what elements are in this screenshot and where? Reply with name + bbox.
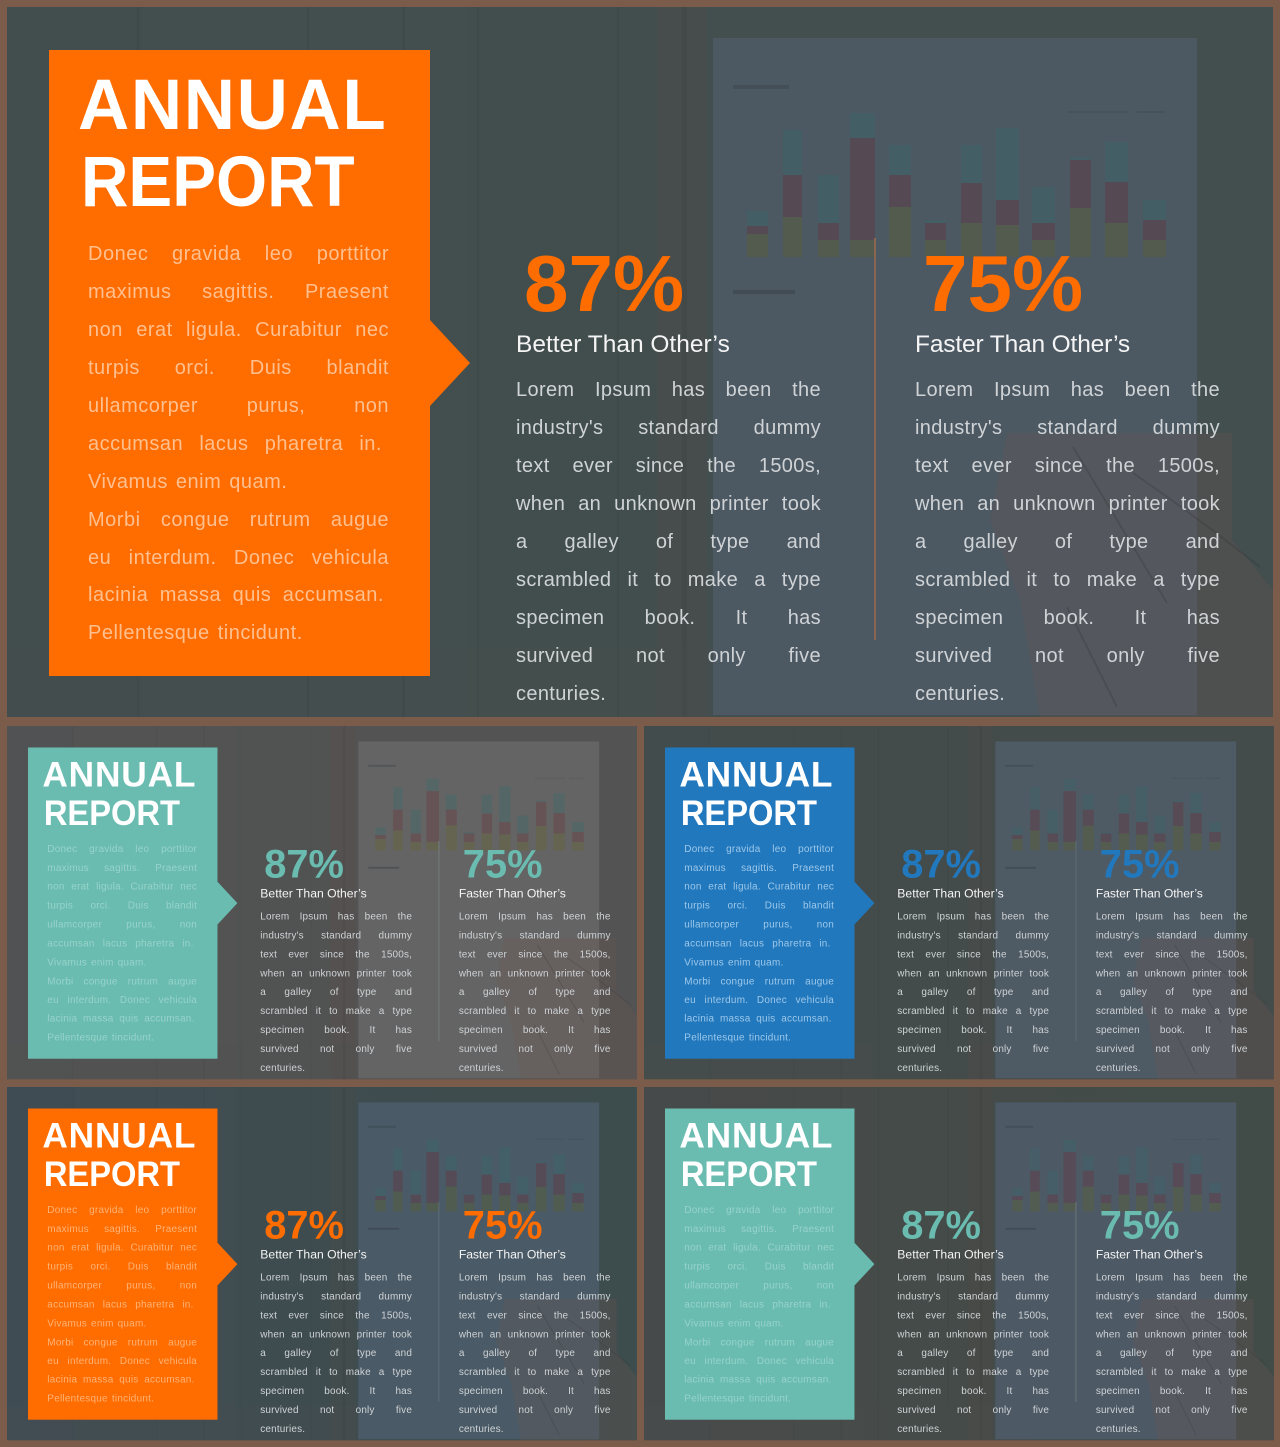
stat body text: centuries.	[1096, 1062, 1141, 1073]
intro text block	[47, 1206, 197, 1404]
stat body text: when an unknown printer took	[897, 1329, 1049, 1340]
stat body text: text ever since the 1500s,	[1096, 949, 1248, 960]
intro text block: turpis orci. Duis blandit	[47, 1261, 197, 1272]
intro text block: maximus sagittis. Praesent	[47, 1223, 197, 1234]
stat body text: when an unknown printer took	[1096, 1329, 1248, 1340]
stat body text: industry's standard dummy	[897, 1291, 1049, 1302]
intro text block: lacinia massa quis accumsan.	[684, 1374, 832, 1385]
title line one: ANNUAL	[42, 1116, 196, 1156]
panel: blue variant	[644, 726, 1274, 1079]
stat body text: specimen book. It has	[1096, 1385, 1248, 1396]
intro text block: turpis orci. Duis blandit	[684, 1261, 834, 1272]
stat body text: Lorem Ipsum has been the	[459, 911, 611, 922]
intro text block: maximus sagittis. Praesent	[88, 281, 389, 303]
background photo with chart	[713, 38, 1273, 717]
stat heading: Faster Than Other’s	[1096, 887, 1203, 901]
stat body text	[1096, 1272, 1248, 1434]
intro text block: accumsan lacus pharetra in.	[684, 1299, 831, 1310]
callout box with arrow	[665, 1108, 874, 1420]
intro text block: Donec gravida leo porttitor	[88, 243, 389, 265]
stat heading: Better Than Other’s	[260, 887, 367, 901]
stat body text: scrambled it to make a type	[459, 1005, 611, 1016]
background photo with chart	[358, 742, 630, 1078]
stat body text: a galley of type and	[459, 1348, 611, 1359]
background photo with chart	[995, 1102, 1274, 1440]
stat number: 87%	[264, 841, 344, 886]
stat body text: specimen book. It has	[459, 1385, 611, 1396]
stat heading: Better Than Other’s	[897, 887, 1004, 901]
stat body text: Lorem Ipsum has been the	[260, 1272, 412, 1283]
stat body text: specimen book. It has	[459, 1024, 611, 1035]
stat body text: Lorem Ipsum has been the	[897, 911, 1049, 922]
stat body text: specimen book. It has	[915, 607, 1220, 629]
intro text block: Morbi congue rutrum augue	[684, 1337, 834, 1348]
stat column: 75 percent	[1096, 841, 1248, 1073]
intro text block	[88, 245, 388, 643]
stat number: 87%	[901, 1202, 981, 1247]
stat body text: a galley of type and	[897, 1348, 1049, 1359]
intro text block: eu interdum. Donec vehicula	[684, 994, 834, 1005]
stat body text: Lorem Ipsum has been the	[897, 1272, 1049, 1283]
stat body text: industry's standard dummy	[260, 1291, 412, 1302]
stat body text: survived not only five	[1096, 1043, 1248, 1054]
stat body text: when an unknown printer took	[260, 1329, 412, 1340]
intro text block: Donec gravida leo porttitor	[684, 843, 834, 854]
stat body text: when an unknown printer took	[897, 968, 1049, 979]
stat number: 75%	[923, 239, 1083, 328]
stat body text: survived not only five	[260, 1404, 412, 1415]
intro text block: non erat ligula. Curabitur nec	[47, 881, 197, 892]
stat body text: survived not only five	[260, 1043, 412, 1054]
stat number: 87%	[264, 1202, 344, 1247]
stat body text: centuries.	[459, 1062, 504, 1073]
stat body text: survived not only five	[1096, 1404, 1248, 1415]
intro text block	[47, 844, 197, 1042]
stat body text	[897, 1272, 1049, 1434]
intro text block: eu interdum. Donec vehicula	[684, 1355, 834, 1366]
title line one: ANNUAL	[78, 66, 387, 145]
stat heading: Faster Than Other’s	[459, 1248, 566, 1262]
intro text block: Vivamus enim quam.	[88, 471, 287, 493]
stat body text: survived not only five	[897, 1043, 1049, 1054]
intro text block: maximus sagittis. Praesent	[684, 862, 834, 873]
stat body text: text ever since the 1500s,	[1096, 1310, 1248, 1321]
background photo with chart	[358, 1102, 637, 1440]
intro text block: Vivamus enim quam.	[47, 957, 147, 968]
stat body text: Lorem Ipsum has been the	[915, 379, 1220, 401]
stat number: 87%	[524, 239, 684, 328]
stat body text: when an unknown printer took	[1096, 968, 1248, 979]
stat column: 75 percent	[458, 1202, 611, 1434]
stat body text: scrambled it to make a type	[260, 1366, 412, 1377]
stat body text: industry's standard dummy	[516, 417, 821, 439]
stat body text: specimen book. It has	[1096, 1024, 1248, 1035]
stat body text: survived not only five	[516, 645, 821, 667]
intro text block: eu interdum. Donec vehicula	[88, 546, 389, 568]
intro text block: Vivamus enim quam.	[684, 957, 784, 968]
intro text block: Pellentesque tincidunt.	[88, 622, 303, 644]
intro text block: Donec gravida leo porttitor	[47, 843, 197, 854]
stat body text	[897, 911, 1049, 1073]
callout box with arrow	[28, 1108, 237, 1420]
background photo with chart	[995, 742, 1274, 1079]
stat body text: Lorem Ipsum has been the	[516, 379, 821, 401]
stat body text	[260, 911, 412, 1073]
stat body text: text ever since the 1500s,	[459, 949, 611, 960]
stat body text: industry's standard dummy	[1096, 930, 1248, 941]
stat body text: survived not only five	[459, 1404, 611, 1415]
stat number: 75%	[1100, 841, 1179, 886]
stat body text: text ever since the 1500s,	[459, 1310, 611, 1321]
stat column: 87 percent	[260, 841, 412, 1073]
stat body text	[915, 379, 1220, 704]
stat column: 87 percent	[897, 841, 1049, 1073]
intro text block: Pellentesque tincidunt.	[684, 1393, 791, 1404]
stat heading: Better Than Other’s	[260, 1248, 367, 1262]
stat body text	[516, 379, 821, 704]
stat body text: scrambled it to make a type	[897, 1366, 1049, 1377]
callout box with arrow	[665, 747, 874, 1059]
stat column: 87 percent	[516, 239, 821, 704]
intro text block: Donec gravida leo porttitor	[47, 1204, 197, 1215]
stat body text: centuries.	[516, 682, 606, 704]
stat body text: when an unknown printer took	[516, 493, 821, 515]
stat body text: centuries.	[915, 682, 1005, 704]
intro text block: accumsan lacus pharetra in.	[47, 1299, 194, 1310]
intro text block: accumsan lacus pharetra in.	[47, 938, 194, 949]
stat body text: a galley of type and	[897, 987, 1049, 998]
intro text block: ullamcorper purus, non	[47, 1280, 197, 1291]
stat body text: when an unknown printer took	[260, 968, 412, 979]
title line one: ANNUAL	[679, 755, 833, 795]
stat body text: scrambled it to make a type	[915, 569, 1220, 591]
intro text block: Donec gravida leo porttitor	[684, 1204, 834, 1215]
intro text block: lacinia massa quis accumsan.	[47, 1374, 195, 1385]
stat body text: text ever since the 1500s,	[260, 1310, 412, 1321]
intro text block: non erat ligula. Curabitur nec	[88, 319, 389, 341]
stat heading: Better Than Other’s	[516, 331, 730, 358]
callout box with arrow	[28, 747, 237, 1059]
stat body text: centuries.	[260, 1423, 305, 1434]
stat body text: industry's standard dummy	[260, 930, 412, 941]
stat body text: specimen book. It has	[260, 1024, 412, 1035]
stat number: 75%	[463, 1202, 542, 1247]
stat heading: Better Than Other’s	[897, 1248, 1004, 1262]
stat body text: scrambled it to make a type	[459, 1366, 611, 1377]
intro text block: turpis orci. Duis blandit	[47, 900, 197, 911]
intro text block: lacinia massa quis accumsan.	[684, 1013, 832, 1024]
stat body text: centuries.	[260, 1062, 305, 1073]
stat body text: specimen book. It has	[897, 1024, 1049, 1035]
intro text block: non erat ligula. Curabitur nec	[684, 881, 834, 892]
stat body text: centuries.	[897, 1062, 942, 1073]
intro text block: Vivamus enim quam.	[47, 1318, 147, 1329]
stat body text: text ever since the 1500s,	[260, 949, 412, 960]
stat body text	[458, 911, 611, 1073]
intro text block: maximus sagittis. Praesent	[684, 1223, 834, 1234]
stat body text: a galley of type and	[260, 987, 412, 998]
stat body text	[260, 1272, 412, 1434]
stat body text: scrambled it to make a type	[897, 1005, 1049, 1016]
stat number: 87%	[901, 841, 981, 886]
title line two: REPORT	[44, 794, 180, 833]
stat number: 75%	[463, 841, 542, 886]
stat body text: centuries.	[1096, 1423, 1141, 1434]
panel: teal variant on dark	[644, 1087, 1274, 1440]
stat body text	[458, 1272, 611, 1434]
intro text block: non erat ligula. Curabitur nec	[684, 1242, 834, 1253]
intro text block: non erat ligula. Curabitur nec	[47, 1242, 197, 1253]
intro text block: eu interdum. Donec vehicula	[47, 1355, 197, 1366]
stat body text: a galley of type and	[516, 531, 821, 553]
intro text block: ullamcorper purus, non	[47, 919, 197, 930]
intro text block: ullamcorper purus, non	[88, 395, 389, 417]
stat body text: survived not only five	[459, 1043, 611, 1054]
stat column: 87 percent	[897, 1202, 1049, 1434]
stat number: 75%	[1100, 1202, 1179, 1247]
stat body text: Lorem Ipsum has been the	[459, 1272, 611, 1283]
stat column: 87 percent	[260, 1202, 412, 1434]
intro text block: Morbi congue rutrum augue	[684, 976, 834, 987]
intro text block	[684, 844, 834, 1042]
stat body text: when an unknown printer took	[459, 1329, 611, 1340]
intro text block: accumsan lacus pharetra in.	[88, 433, 382, 455]
panel: main annual report orange	[7, 7, 1273, 717]
intro text block: turpis orci. Duis blandit	[684, 900, 834, 911]
intro text block: Pellentesque tincidunt.	[47, 1032, 154, 1043]
intro text block	[684, 1206, 834, 1404]
intro text block: Vivamus enim quam.	[684, 1318, 784, 1329]
title line one: ANNUAL	[679, 1116, 833, 1156]
stat body text: when an unknown printer took	[459, 968, 611, 979]
stat body text: scrambled it to make a type	[1096, 1005, 1248, 1016]
stat heading: Faster Than Other’s	[459, 887, 566, 901]
stat body text: scrambled it to make a type	[1096, 1366, 1248, 1377]
stat body text: a galley of type and	[459, 987, 611, 998]
intro text block: ullamcorper purus, non	[684, 1280, 834, 1291]
stat body text: text ever since the 1500s,	[516, 455, 821, 477]
intro text block: Pellentesque tincidunt.	[684, 1032, 791, 1043]
stat body text: industry's standard dummy	[915, 417, 1220, 439]
stat heading: Faster Than Other’s	[915, 331, 1130, 358]
stat body text: scrambled it to make a type	[260, 1005, 412, 1016]
stat body text: scrambled it to make a type	[516, 569, 821, 591]
title line two: REPORT	[681, 794, 817, 833]
stat body text: Lorem Ipsum has been the	[1096, 911, 1248, 922]
stat body text: specimen book. It has	[260, 1385, 412, 1396]
panel: teal variant on grey	[7, 726, 637, 1079]
stat body text: industry's standard dummy	[1096, 1291, 1248, 1302]
stat body text: survived not only five	[915, 645, 1220, 667]
intro text block: lacinia massa quis accumsan.	[88, 584, 384, 606]
stat column: 75 percent	[458, 841, 611, 1073]
stat body text: a galley of type and	[915, 531, 1220, 553]
stat body text	[1096, 911, 1248, 1073]
stat body text: a galley of type and	[1096, 1348, 1248, 1359]
stat body text: text ever since the 1500s,	[897, 1310, 1049, 1321]
stat body text: industry's standard dummy	[459, 1291, 611, 1302]
callout box with arrow	[49, 50, 470, 676]
title line two: REPORT	[44, 1155, 180, 1194]
title line two: REPORT	[81, 143, 355, 222]
stat body text: Lorem Ipsum has been the	[1096, 1272, 1248, 1283]
stat body text: when an unknown printer took	[915, 493, 1220, 515]
stat heading: Faster Than Other’s	[1096, 1248, 1203, 1262]
intro text block: Pellentesque tincidunt.	[47, 1393, 154, 1404]
title line one: ANNUAL	[42, 755, 196, 795]
stat body text: specimen book. It has	[897, 1385, 1049, 1396]
stat body text: industry's standard dummy	[897, 930, 1049, 941]
stat body text: a galley of type and	[260, 1348, 412, 1359]
stat column: 75 percent	[915, 239, 1220, 704]
intro text block: ullamcorper purus, non	[684, 919, 834, 930]
stat body text: Lorem Ipsum has been the	[260, 911, 412, 922]
intro text block: Morbi congue rutrum augue	[88, 509, 389, 531]
stat body text: centuries.	[459, 1423, 504, 1434]
stat body text: centuries.	[897, 1423, 942, 1434]
stat body text: text ever since the 1500s,	[897, 949, 1049, 960]
intro text block: maximus sagittis. Praesent	[47, 862, 197, 873]
stat body text: text ever since the 1500s,	[915, 455, 1220, 477]
panel: orange variant	[7, 1087, 637, 1440]
stat body text: survived not only five	[897, 1404, 1049, 1415]
stat body text: specimen book. It has	[516, 607, 821, 629]
intro text block: Morbi congue rutrum augue	[47, 976, 197, 987]
intro text block: eu interdum. Donec vehicula	[47, 994, 197, 1005]
intro text block: lacinia massa quis accumsan.	[47, 1013, 195, 1024]
stat body text: industry's standard dummy	[459, 930, 611, 941]
intro text block: accumsan lacus pharetra in.	[684, 938, 831, 949]
title line two: REPORT	[681, 1155, 817, 1194]
stat body text: a galley of type and	[1096, 987, 1248, 998]
intro text block: turpis orci. Duis blandit	[88, 357, 389, 379]
intro text block: Morbi congue rutrum augue	[47, 1337, 197, 1348]
stat column: 75 percent	[1096, 1202, 1248, 1434]
